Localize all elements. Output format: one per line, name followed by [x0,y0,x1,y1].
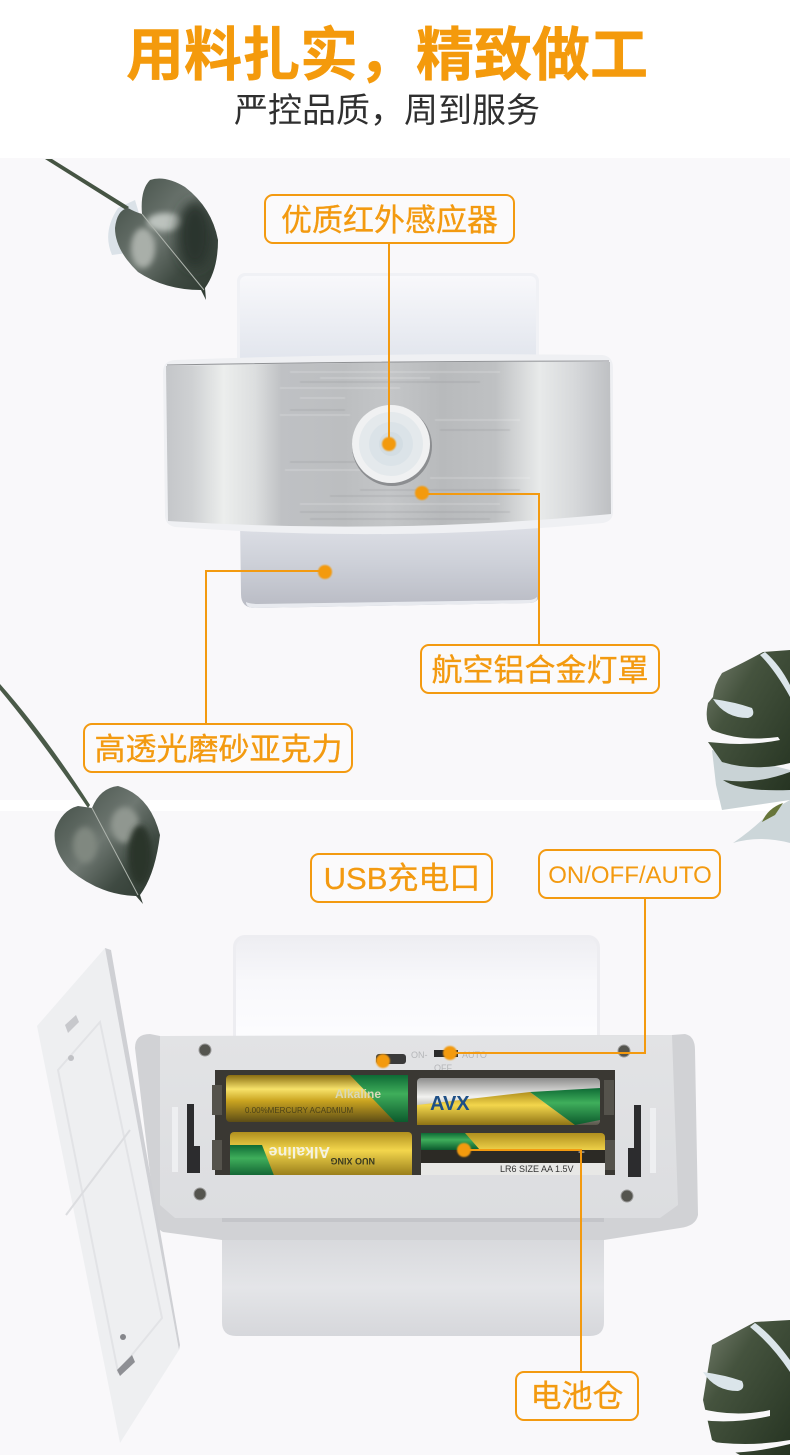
callout: infrared sensor [265,195,514,451]
product: lamp back view [37,935,698,1443]
callout: frosted acrylic: 高透光磨砂亚克力 [94,732,342,767]
callout label: switch [443,850,720,1060]
battery bottom left [230,1132,412,1178]
callout label: switch: ON/OFF/AUTO [548,862,712,889]
battery top left [226,1075,408,1122]
switch [434,1050,458,1057]
subtitle: 严控品质，周到服务 [234,92,540,130]
battery bottom right [421,1133,605,1179]
background: title band [0,0,790,158]
callout: aluminium shade: 航空铝合金灯罩 [432,653,648,688]
acrylic upper shade [233,935,600,1050]
rear plate [160,1035,678,1218]
battery top left: 0.00%MERCURY ACADMIUM [245,1106,354,1115]
battery top right: AVX [430,1093,470,1115]
callout label: USB port [311,854,492,902]
title: 用料扎实，精致做工 [126,23,648,88]
icon: monstera leaf bottom right [698,1320,790,1455]
PIR sensor [352,405,432,486]
batteries [226,1075,605,1179]
battery bottom left: NUO XING [330,1156,375,1166]
brushed metal lines [280,372,530,504]
switch labels: OFF [434,1063,452,1073]
shell top shadow line [167,361,609,365]
switch labels: ON- [411,1050,428,1060]
callout: battery compartment: 电池仓 [530,1379,624,1414]
callout: frosted acrylic [84,565,352,772]
acrylic lower shade [222,1215,604,1336]
mounting slots [172,1104,656,1177]
icon: monstera leaf right [707,650,790,843]
aluminium shell rim [163,354,613,534]
switch labels: AUTO [462,1050,487,1060]
marker: USB port [376,1054,390,1068]
battery top right [417,1078,600,1125]
battery bottom left: Alkaline [269,1143,330,1160]
battery compartment wings [135,1034,698,1240]
background: upper product panel [0,158,790,800]
battery bottom right: + [578,1145,585,1159]
product: wall lamp front view [163,273,613,608]
icon: leaf top left [45,159,218,300]
callout label: USB port: USB充电口 [324,861,480,896]
aluminium shell face [166,362,611,527]
switch labels [411,1050,487,1073]
battery terminals [212,1080,615,1170]
acrylic upper shade [237,273,539,368]
icon: leaf mid left [0,684,160,904]
battery bottom right: LR6 SIZE AA 1.5V [500,1164,574,1174]
callout: aluminium shade [415,486,659,693]
lower lip [222,1218,604,1222]
lower shade light edge [246,597,537,608]
battery cover [37,948,180,1443]
battery cavity [215,1070,615,1175]
acrylic lower shade [240,520,540,608]
callout: infrared sensor: 优质红外感应器 [281,203,498,238]
background: lower product panel [0,811,790,1455]
battery top left: Alkaline [335,1087,381,1101]
screws [194,1044,633,1202]
USB port [376,1054,406,1064]
callout: battery compartment [457,1143,638,1420]
background: divider band [0,800,790,811]
